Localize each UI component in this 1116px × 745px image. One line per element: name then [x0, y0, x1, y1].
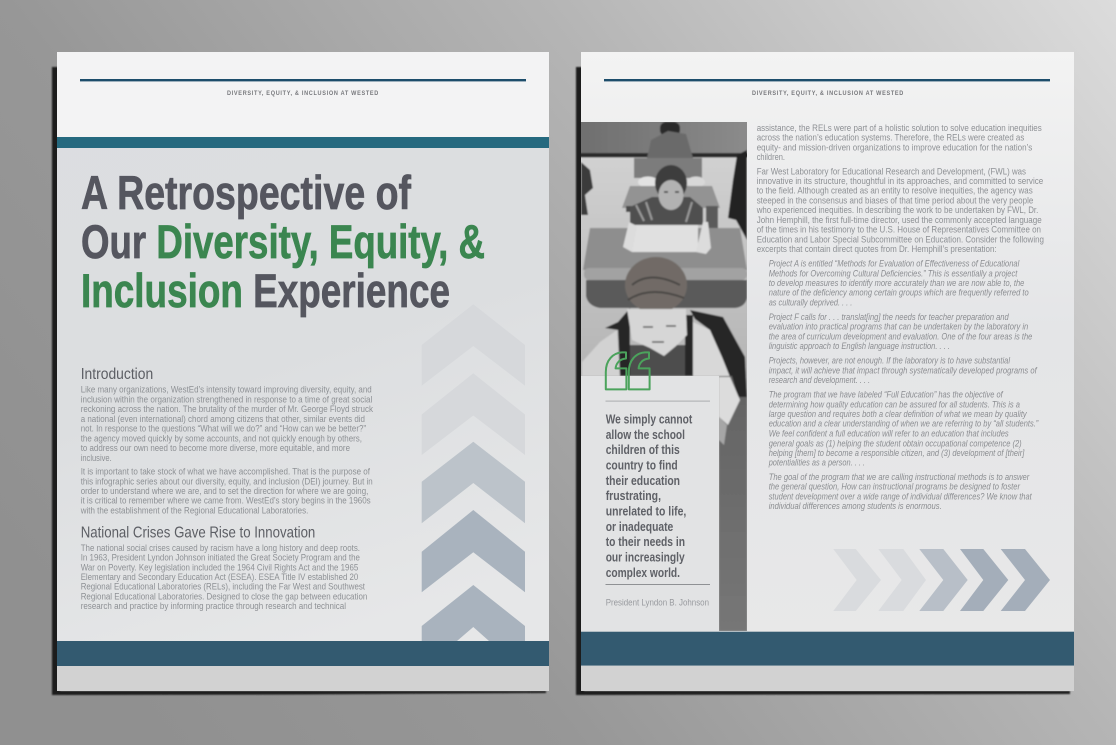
- card background: [581, 376, 719, 631]
- quote text: We simply cannot: [606, 412, 693, 426]
- text block: body copy: excerpts that contain direct quotes from Dr. Hemphill’s presentation:: [757, 244, 997, 255]
- quote text: our increasingly: [606, 550, 685, 564]
- text block: introduction: a national (even international) chord among citizens that other, similar events did: [81, 414, 365, 425]
- lower right strip: [719, 376, 747, 631]
- page 1 top header area: [57, 52, 549, 137]
- chevrons pointing right: [833, 549, 1050, 611]
- text block: Hemphill excerpts: Projects, however, are not enough. If the laboratory is to have substantial: [769, 356, 1011, 367]
- text block: introduction: to address our own need to become more diverse, more equitable, and more: [81, 443, 350, 454]
- title: Our Diversity, Equity, &: [81, 215, 485, 268]
- text block: introduction: this infographic series about our diversity, equity, and inclusion (DEI) journey. But in: [81, 476, 373, 487]
- text block: Hemphill excerpts: Project F calls for . . . translat[ing] the needs for teacher preparation and: [769, 312, 1009, 323]
- quote text: complex world.: [606, 566, 680, 580]
- header rule: [80, 79, 526, 81]
- text block: body copy: children.: [757, 152, 785, 163]
- text block: national crises: The national social crises caused by racism have a long history and deep roots.: [81, 543, 360, 554]
- text block: Hemphill excerpts: individual differences among students is enormous.: [769, 501, 942, 512]
- text block: body copy: to the field. Although created as an entity to resolve inequities, the agency was: [757, 186, 1033, 197]
- page 1 shadow: [52, 67, 546, 695]
- page 2 sheet: [581, 52, 1074, 666]
- text block: national crises: Regional Educational Laboratories. Designed to close the gap between education: [81, 591, 367, 602]
- text block: body copy: who experienced inequities. In describing the work to be undertaken by FWL, Dr.: [756, 205, 1038, 216]
- quote text: children of this: [606, 443, 680, 457]
- chevrons pointing up: [422, 304, 525, 641]
- text block: introduction: order to understand where we are, and to set the direction for where we are going,: [81, 486, 368, 497]
- quote text: [606, 412, 693, 580]
- text block: Hemphill excerpts: Project A is entitled “Methods for Evaluation of Effectiveness of Educational: [769, 259, 1020, 270]
- text block: Hemphill excerpts: to develop measures to identify more accurately than we are now able to, the: [769, 278, 1024, 289]
- text block: body copy: Education and Labor Special Subcommittee on Education. Consider the following: [757, 234, 1044, 245]
- bottom band: [581, 632, 1074, 666]
- text block: Hemphill excerpts: linguistic approach to English language instruction. . . .: [769, 341, 950, 352]
- quote text: to their needs in: [606, 535, 685, 549]
- running header: DIVERSITY, EQUITY, & INCLUSION AT WESTED: [227, 90, 379, 97]
- running header: DIVERSITY, EQUITY, & INCLUSION AT WESTED: [752, 90, 904, 97]
- text block: national crises: War on Poverty. Key legislation included the 1964 Civil Rights Act and the 1965: [81, 562, 358, 573]
- heading: introduction: Introduction: [81, 366, 153, 383]
- front child: [625, 257, 687, 313]
- page 2 shadow: [576, 67, 1070, 695]
- text block: Hemphill excerpts: [768, 259, 1039, 512]
- quote text: frustrating,: [606, 489, 661, 503]
- icon: quotation marks: [606, 352, 650, 389]
- text block: Hemphill excerpts: as culturally deprived. . . .: [769, 297, 852, 308]
- text block: national crises: research and practice by informing practice through research and technical: [81, 601, 346, 612]
- text block: Hemphill excerpts: potentialities as a person. . . .: [768, 458, 865, 469]
- quote card: [581, 352, 719, 631]
- text block: introduction: inclusive.: [81, 453, 112, 464]
- text block: introduction: It is important to take stock of what we have accomplished. That is the purpose of: [81, 467, 370, 478]
- text block: Hemphill excerpts: The goal of the program that we are calling instructional methods is to answer: [769, 472, 1030, 483]
- text block: Hemphill excerpts: determining how quality education can be assured for all students. This is a: [769, 399, 1020, 410]
- heading: national crises: National Crises Gave Rise to Innovation: [81, 524, 315, 542]
- photo: children at school desks: [575, 116, 755, 636]
- text block: Hemphill excerpts: We feel confident a full education will refer to an education that includes: [769, 428, 1009, 439]
- text block: introduction: the agency moved quickly by some accounts, and not quickly enough by others,: [81, 433, 362, 444]
- text block: Hemphill excerpts: nature of the deficiency among certain groups which are frequently referred to: [769, 288, 1029, 299]
- text block: Hemphill excerpts: impact, it will achieve that impact through systematically developed programs of: [769, 365, 1038, 376]
- quote top rule: [606, 401, 710, 402]
- bottom margin strip: [57, 666, 549, 691]
- quote text: country to find: [606, 458, 678, 472]
- text block: Hemphill excerpts: research and development. . . .: [769, 375, 870, 386]
- text block: Hemphill excerpts: Methods for Overcoming Cultural Deficiencies.” This is essentially a project: [769, 268, 1018, 279]
- text block: body copy: Far West Laboratory for Educational Research and Development, (FWL) was: [757, 166, 1026, 177]
- text block: introduction: [80, 385, 373, 516]
- text block: national crises: Elementary and Secondary Education Act (ESEA). ESEA Title IV established 20: [81, 572, 358, 583]
- text block: body copy: of the times in his testimony to the U.S. House of Representatives Committee on: [757, 225, 1041, 236]
- text block: Hemphill excerpts: evaluation into practical programs that can be undertaken by the laboratory in: [769, 322, 1028, 333]
- quote attribution: President Lyndon B. Johnson: [606, 598, 709, 608]
- text block: body copy: [756, 123, 1044, 255]
- text block: body copy: steeped in the consensus and biases of that time period about the very people: [757, 195, 1033, 206]
- text block: body copy: John Hemphill, the first full-time director, used the commonly accepted language: [757, 215, 1042, 226]
- text block: introduction: reckoning across the nation. The brutality of the murder of Mr. George Floyd struck: [81, 404, 373, 415]
- text block: body copy: innovative in its structure, thoughtful in its approaches, and committed to service: [757, 176, 1043, 187]
- text block: national crises: [81, 543, 367, 612]
- quote text: or inadequate: [606, 520, 673, 534]
- text block: Hemphill excerpts: student development over a wide range of individual differences? We know that: [769, 491, 1032, 502]
- text block: national crises: Regional Educational Laboratories (RELs), including the Far West and Southwest: [81, 582, 365, 593]
- panel: left page: [57, 52, 549, 691]
- quote text: allow the school: [606, 428, 685, 442]
- text block: Hemphill excerpts: helping [them] to become a responsible citizen, and (3) development of [their]: [769, 448, 1025, 459]
- text block: introduction: not. In response to the questions “What will we do?” and “How can we be better?”: [81, 424, 366, 435]
- bottom band: [57, 641, 549, 666]
- text block: introduction: Like many organizations, WestEd’s intensity toward improving diversity, equity, and: [81, 385, 372, 396]
- text block: introduction: with the establishment of the Regional Educational Laboratories.: [80, 505, 308, 516]
- text block: Hemphill excerpts: the area of curriculum development and evaluation. One of the four areas is the: [769, 331, 1032, 342]
- text block: introduction: it is critical to remember where we came from. WestEd’s story begins in the 1960s: [81, 496, 371, 507]
- quote bottom rule: [606, 584, 710, 585]
- text block: national crises: In 1963, President Lyndon Johnson initiated the Great Society Program and the: [81, 553, 360, 564]
- text block: Hemphill excerpts: the general question, How can instructional programs be designed to foster: [769, 482, 1021, 493]
- panel: right page: [575, 52, 1074, 691]
- top teal band: [57, 137, 549, 148]
- text block: Hemphill excerpts: general goals as (1) helping the student obtain occupational competence (2): [769, 438, 1022, 449]
- text block: Hemphill excerpts: large question and requires both a clear definition of what we mean by quality: [769, 409, 1028, 420]
- title: [81, 166, 485, 317]
- text block: body copy: equity- and mission-driven organizations to improve education for the nation’s: [757, 142, 1032, 153]
- page 1 sheet: [57, 52, 549, 691]
- text block: Hemphill excerpts: education and a clear understanding of when we are referring to by “all students.”: [769, 419, 1039, 430]
- text block: Hemphill excerpts: The program that we have labeled “Full Education” has the objective of: [769, 390, 1004, 401]
- title: Inclusion Experience: [81, 264, 450, 317]
- text block: body copy: assistance, the RELs were part of a holistic solution to solve education inequities: [757, 123, 1042, 134]
- bottom margin strip: [581, 666, 1074, 691]
- quote text: their education: [606, 474, 680, 488]
- header rule: [604, 79, 1050, 81]
- title: A Retrospective of: [81, 166, 411, 219]
- quote text: unrelated to life,: [606, 504, 686, 518]
- text block: body copy: across the nation’s education systems. Therefore, the RELs were created as: [757, 133, 1024, 144]
- text block: introduction: inclusion within the organization strengthened in response to a time of great social: [81, 394, 372, 405]
